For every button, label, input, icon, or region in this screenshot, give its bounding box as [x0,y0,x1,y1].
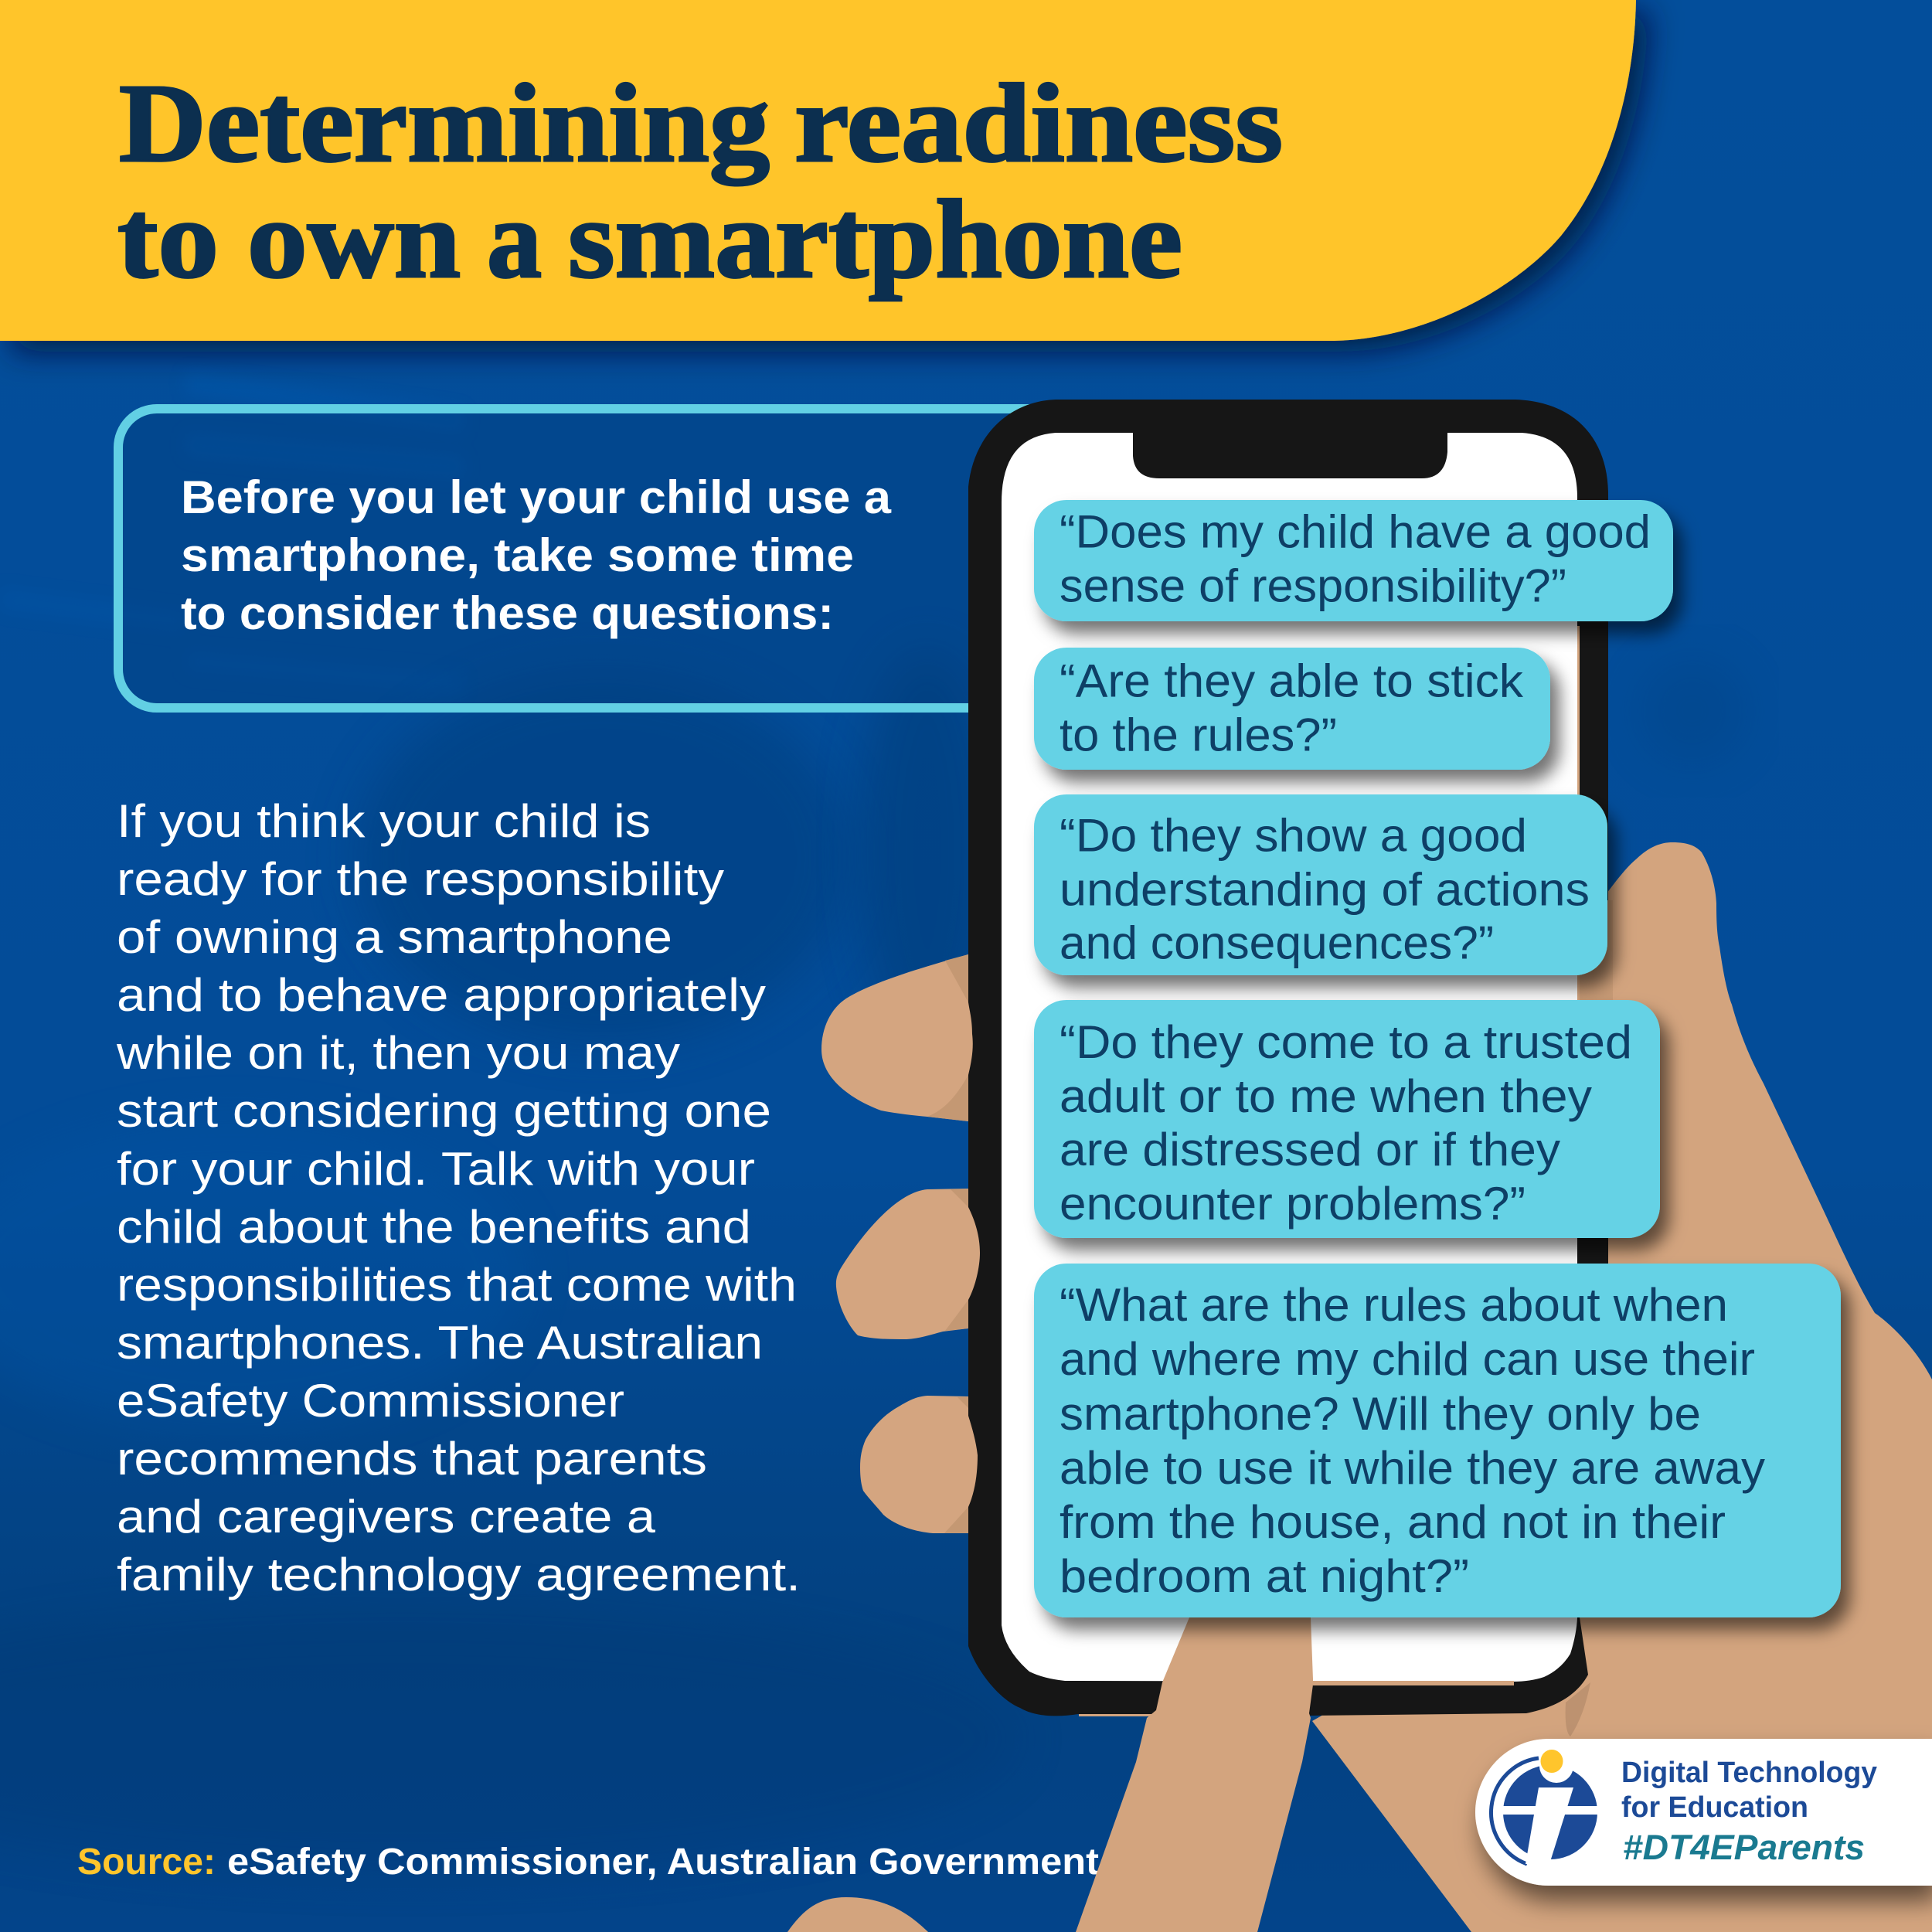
banner [0,0,1636,341]
bubble 3 text: “Do they show a good [1060,810,1527,861]
intro text [181,471,892,639]
title: a [487,178,542,301]
bubble 4 text: encounter problems?” [1060,1178,1526,1230]
body paragraph: family technology agreement. [117,1549,801,1600]
bubble 5 text: “What are the rules about when [1060,1279,1728,1331]
bubble 5 text: and where my child can use their [1060,1333,1755,1385]
hand: index finger [1076,1617,1313,1932]
bubble 5 text: from the house, and not in their [1060,1496,1726,1548]
bubble 1 text [1060,505,1651,612]
question bubble 1 [1034,500,1673,621]
hashtag: #DT4EParents [1623,1828,1865,1867]
source line: eSafety Commissioner, Australian Government [227,1842,1099,1883]
phone screen [1002,433,1577,1682]
hand: finger 3 [860,1396,978,1533]
source line: Source: [77,1842,216,1883]
bubble 4 text: adult or to me when they [1060,1070,1592,1122]
body paragraph: smartphones. The Australian [117,1317,763,1369]
title: readiness [794,62,1283,185]
bubble 1 text: sense of responsibility?” [1060,560,1566,612]
body paragraph: recommends that parents [117,1433,707,1485]
hand: finger 2 [836,1189,980,1339]
intro text: to consider these questions: [181,587,834,639]
body paragraph: responsibilities that come with [117,1259,797,1311]
title: own [247,178,461,301]
body paragraph: while on it, then you may [116,1027,680,1079]
bubble 2 text [1060,655,1524,760]
bubble 5 text: able to use it while they are away [1060,1442,1765,1494]
bubble 3 text: and consequences?” [1060,917,1494,969]
title: smartphone [568,178,1182,301]
body paragraph: start considering getting one [117,1085,771,1137]
question bubble 2 [1034,648,1550,770]
hand: crease [1566,1682,1590,1736]
question bubble 3 [1034,794,1607,975]
bubble 4 text: “Do they come to a trusted [1060,1016,1632,1068]
hand: skin visible beside phone edge [1577,626,1613,1005]
body paragraph: of owning a smartphone [117,911,672,963]
body paragraph: child about the benefits and [117,1201,751,1253]
logo text: for Education [1621,1791,1808,1824]
title: Determining [119,62,770,185]
body paragraph: and caregivers create a [117,1491,656,1543]
body paragraph: for your child. Talk with your [117,1143,755,1195]
bubble 5 text: smartphone? Will they only be [1060,1388,1701,1440]
question bubble 4 [1034,1000,1660,1238]
phone [968,400,1608,1716]
question bubble 5 [1034,1264,1841,1617]
panel: intro question box [118,409,1123,708]
title: to [117,178,219,301]
bubble 5 text: bedroom at night?” [1060,1550,1469,1602]
body paragraph: If you think your child is [117,795,651,847]
bubble 4 text: are distressed or if they [1060,1124,1560,1175]
hand: palm and thumb [1312,842,1932,1932]
bubble 5 text [1060,1279,1765,1602]
bubble 3 text: understanding of actions [1060,864,1590,915]
bubble 3 text [1060,810,1590,969]
title [117,62,1283,301]
body paragraph: ready for the responsibility [117,853,724,905]
logo text [1621,1757,1877,1824]
body paragraph: and to behave appropriately [117,969,766,1021]
logo badge [1475,1739,1932,1886]
logo text: Digital Technology [1621,1757,1877,1789]
body paragraph [116,795,801,1600]
bubble 4 text [1060,1016,1632,1230]
bubble 1 text: “Does my child have a good [1060,505,1651,558]
intro text: Before you let your child use a [181,471,892,523]
hand: finger 1 [821,954,973,1121]
bubble 2 text: “Are they able to stick [1060,655,1524,706]
logo icon [1492,1749,1601,1864]
hand: bottom knuckle [787,1897,928,1932]
body paragraph: eSafety Commissioner [117,1375,624,1427]
intro text: smartphone, take some time [181,529,854,581]
bubble 2 text: to the rules?” [1060,709,1337,760]
